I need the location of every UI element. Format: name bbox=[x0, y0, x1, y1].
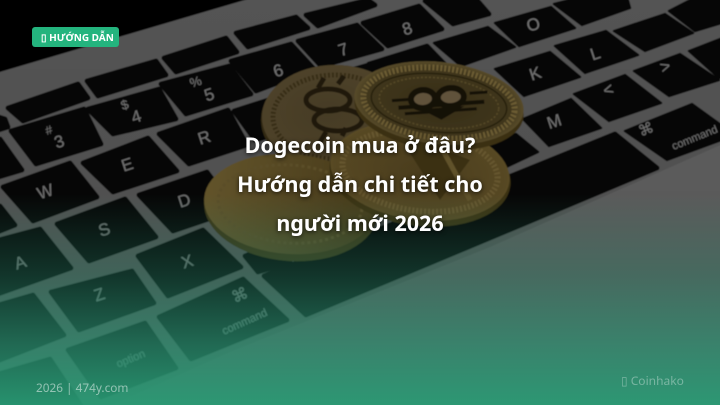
key labels: O bbox=[524, 14, 543, 36]
key labels: D bbox=[176, 190, 193, 212]
key labels: Z bbox=[91, 284, 107, 305]
key labels: > bbox=[658, 56, 673, 77]
keyboard deck below keys bbox=[90, 143, 720, 405]
coin: top right bitcoin bbox=[350, 53, 528, 159]
key labels: M bbox=[545, 111, 564, 133]
key labels: ⌘ bbox=[636, 119, 656, 141]
key labels: E bbox=[119, 154, 136, 176]
key labels: < bbox=[601, 79, 616, 100]
title bbox=[236, 131, 484, 240]
key labels: W bbox=[35, 180, 56, 203]
title: Hướng dẫn chi tiết cho bbox=[237, 170, 483, 199]
title: người mới 2026 bbox=[276, 209, 444, 238]
key labels: S bbox=[96, 219, 113, 241]
category badge: ▯ HƯỚNG DẪN bbox=[41, 30, 114, 44]
key labels: 3 bbox=[52, 131, 67, 152]
key labels: L bbox=[588, 43, 603, 64]
title: Dogecoin mua ở đâu? bbox=[245, 131, 475, 160]
key labels: % bbox=[188, 73, 204, 91]
key labels: 5 bbox=[202, 84, 217, 105]
keys: right side bbox=[434, 0, 720, 179]
category badge bbox=[32, 27, 119, 47]
key labels: X bbox=[179, 251, 196, 273]
coin: bottom left bbox=[201, 148, 381, 267]
key labels: 7 bbox=[336, 39, 351, 60]
key labels: ⌘ bbox=[229, 285, 251, 307]
dark background beyond laptop edge bbox=[0, 0, 262, 74]
key labels: command bbox=[220, 307, 269, 338]
key labels: K bbox=[527, 63, 544, 85]
key labels: R bbox=[196, 127, 213, 149]
key labels: 4 bbox=[129, 106, 144, 127]
source brand: ▯ Coinhako bbox=[621, 372, 684, 389]
key labels: $ bbox=[119, 96, 131, 113]
key labels: command bbox=[670, 124, 720, 153]
space bar bbox=[264, 134, 657, 315]
key labels: A bbox=[12, 252, 29, 274]
coin: front right bbox=[323, 111, 517, 237]
coin: back left bitcoin bbox=[261, 65, 409, 175]
key labels: # bbox=[43, 122, 54, 138]
key labels: option bbox=[115, 348, 147, 370]
key labels: 6 bbox=[271, 60, 286, 81]
key labels: 8 bbox=[400, 18, 415, 39]
footer: year and site: 2026 | 474y.com bbox=[36, 380, 128, 396]
